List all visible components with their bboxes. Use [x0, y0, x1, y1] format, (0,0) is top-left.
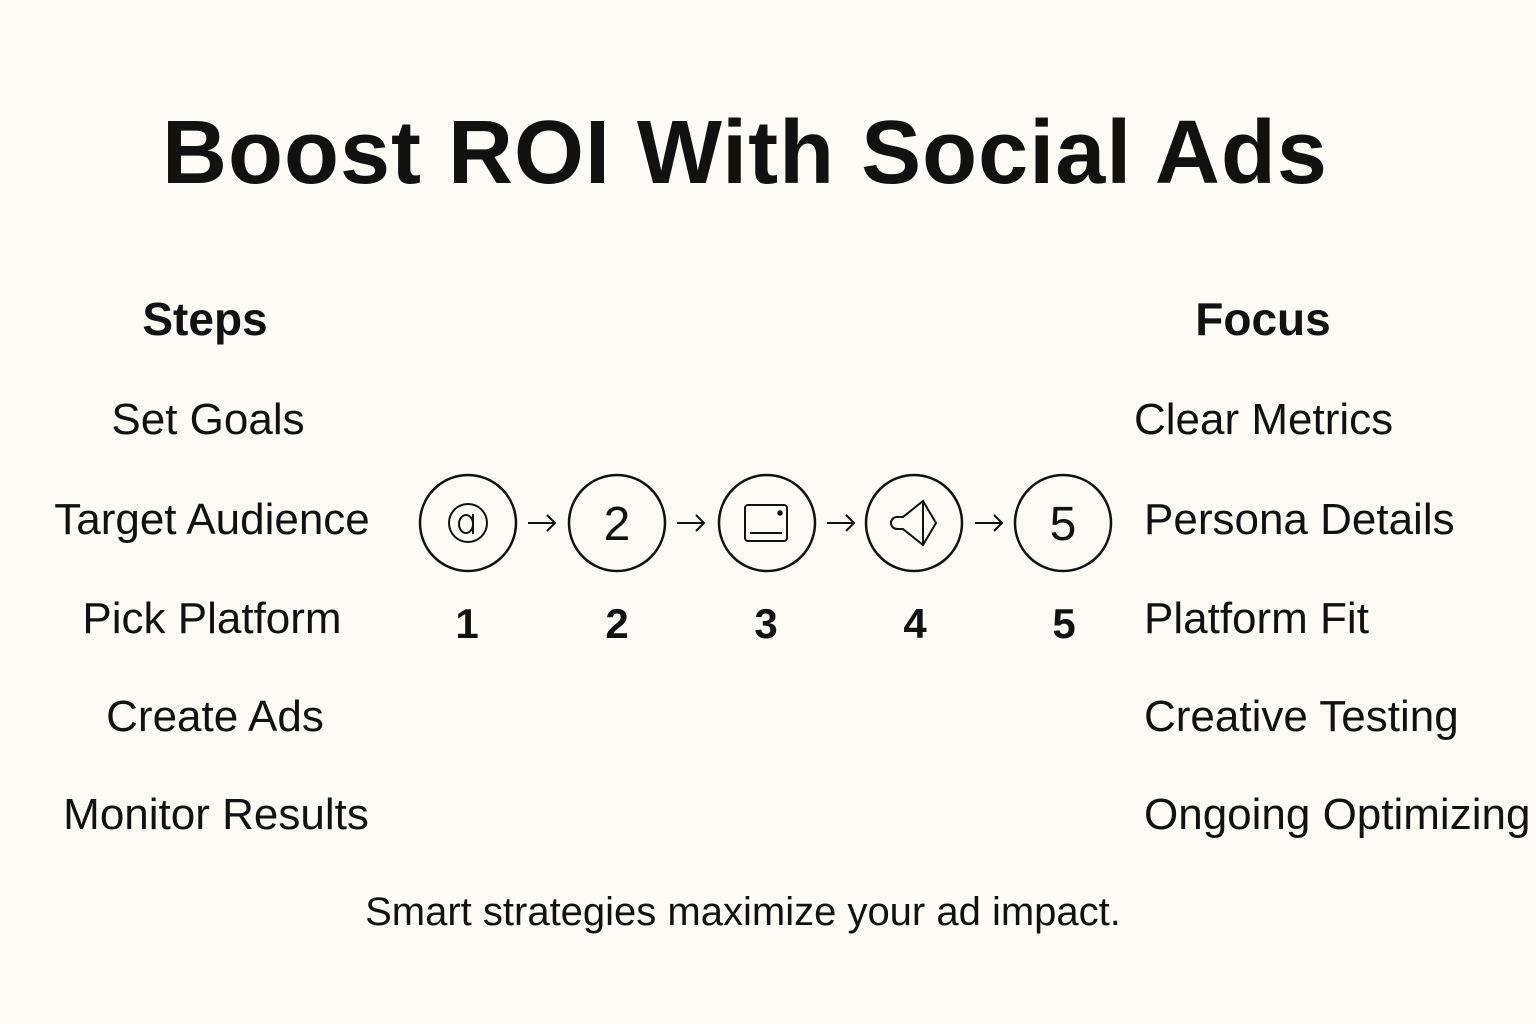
step numbers: [455, 600, 1076, 647]
step numbers: 2: [605, 600, 629, 647]
panel: steps list: [54, 395, 370, 839]
step numbers: 1: [455, 600, 479, 647]
step 1 circle: at icon: [420, 475, 516, 571]
focus: clear metrics: Clear Metrics: [1134, 395, 1393, 444]
panel: focus list: [1134, 395, 1530, 839]
footer tagline: Smart strategies maximize your ad impact.: [365, 890, 1121, 934]
focus: persona details: Persona Details: [1144, 495, 1455, 544]
step 3 circle: screen icon: [719, 475, 815, 571]
step 2 circle: [569, 475, 665, 571]
arrow 1: [528, 515, 555, 531]
step numbers: 3: [754, 600, 778, 647]
focus: platform fit: Platform Fit: [1144, 594, 1369, 643]
heading: steps: Steps: [142, 293, 268, 345]
step numbers: 4: [903, 600, 927, 647]
arrow 3: [827, 515, 854, 531]
step 2 circle: 2: [604, 498, 630, 551]
step: target audience: Target Audience: [54, 495, 370, 544]
focus: creative testing: Creative Testing: [1144, 692, 1459, 741]
step: set goals: Set Goals: [111, 395, 305, 444]
arrow 2: [677, 515, 704, 531]
heading: focus: Focus: [1195, 293, 1331, 345]
title: Boost ROI With Social Ads: [162, 103, 1328, 203]
step: monitor results: Monitor Results: [63, 790, 369, 839]
arrow 4: [975, 515, 1002, 531]
step numbers: 5: [1052, 600, 1076, 647]
focus: ongoing optimizing: Ongoing Optimizing: [1144, 790, 1530, 839]
step 4 circle: megaphone icon: [866, 475, 962, 571]
step 5 circle: 5: [1050, 498, 1076, 551]
step: pick platform: Pick Platform: [82, 594, 342, 643]
step: create ads: Create Ads: [106, 692, 324, 741]
step 5 circle: [1015, 475, 1111, 571]
